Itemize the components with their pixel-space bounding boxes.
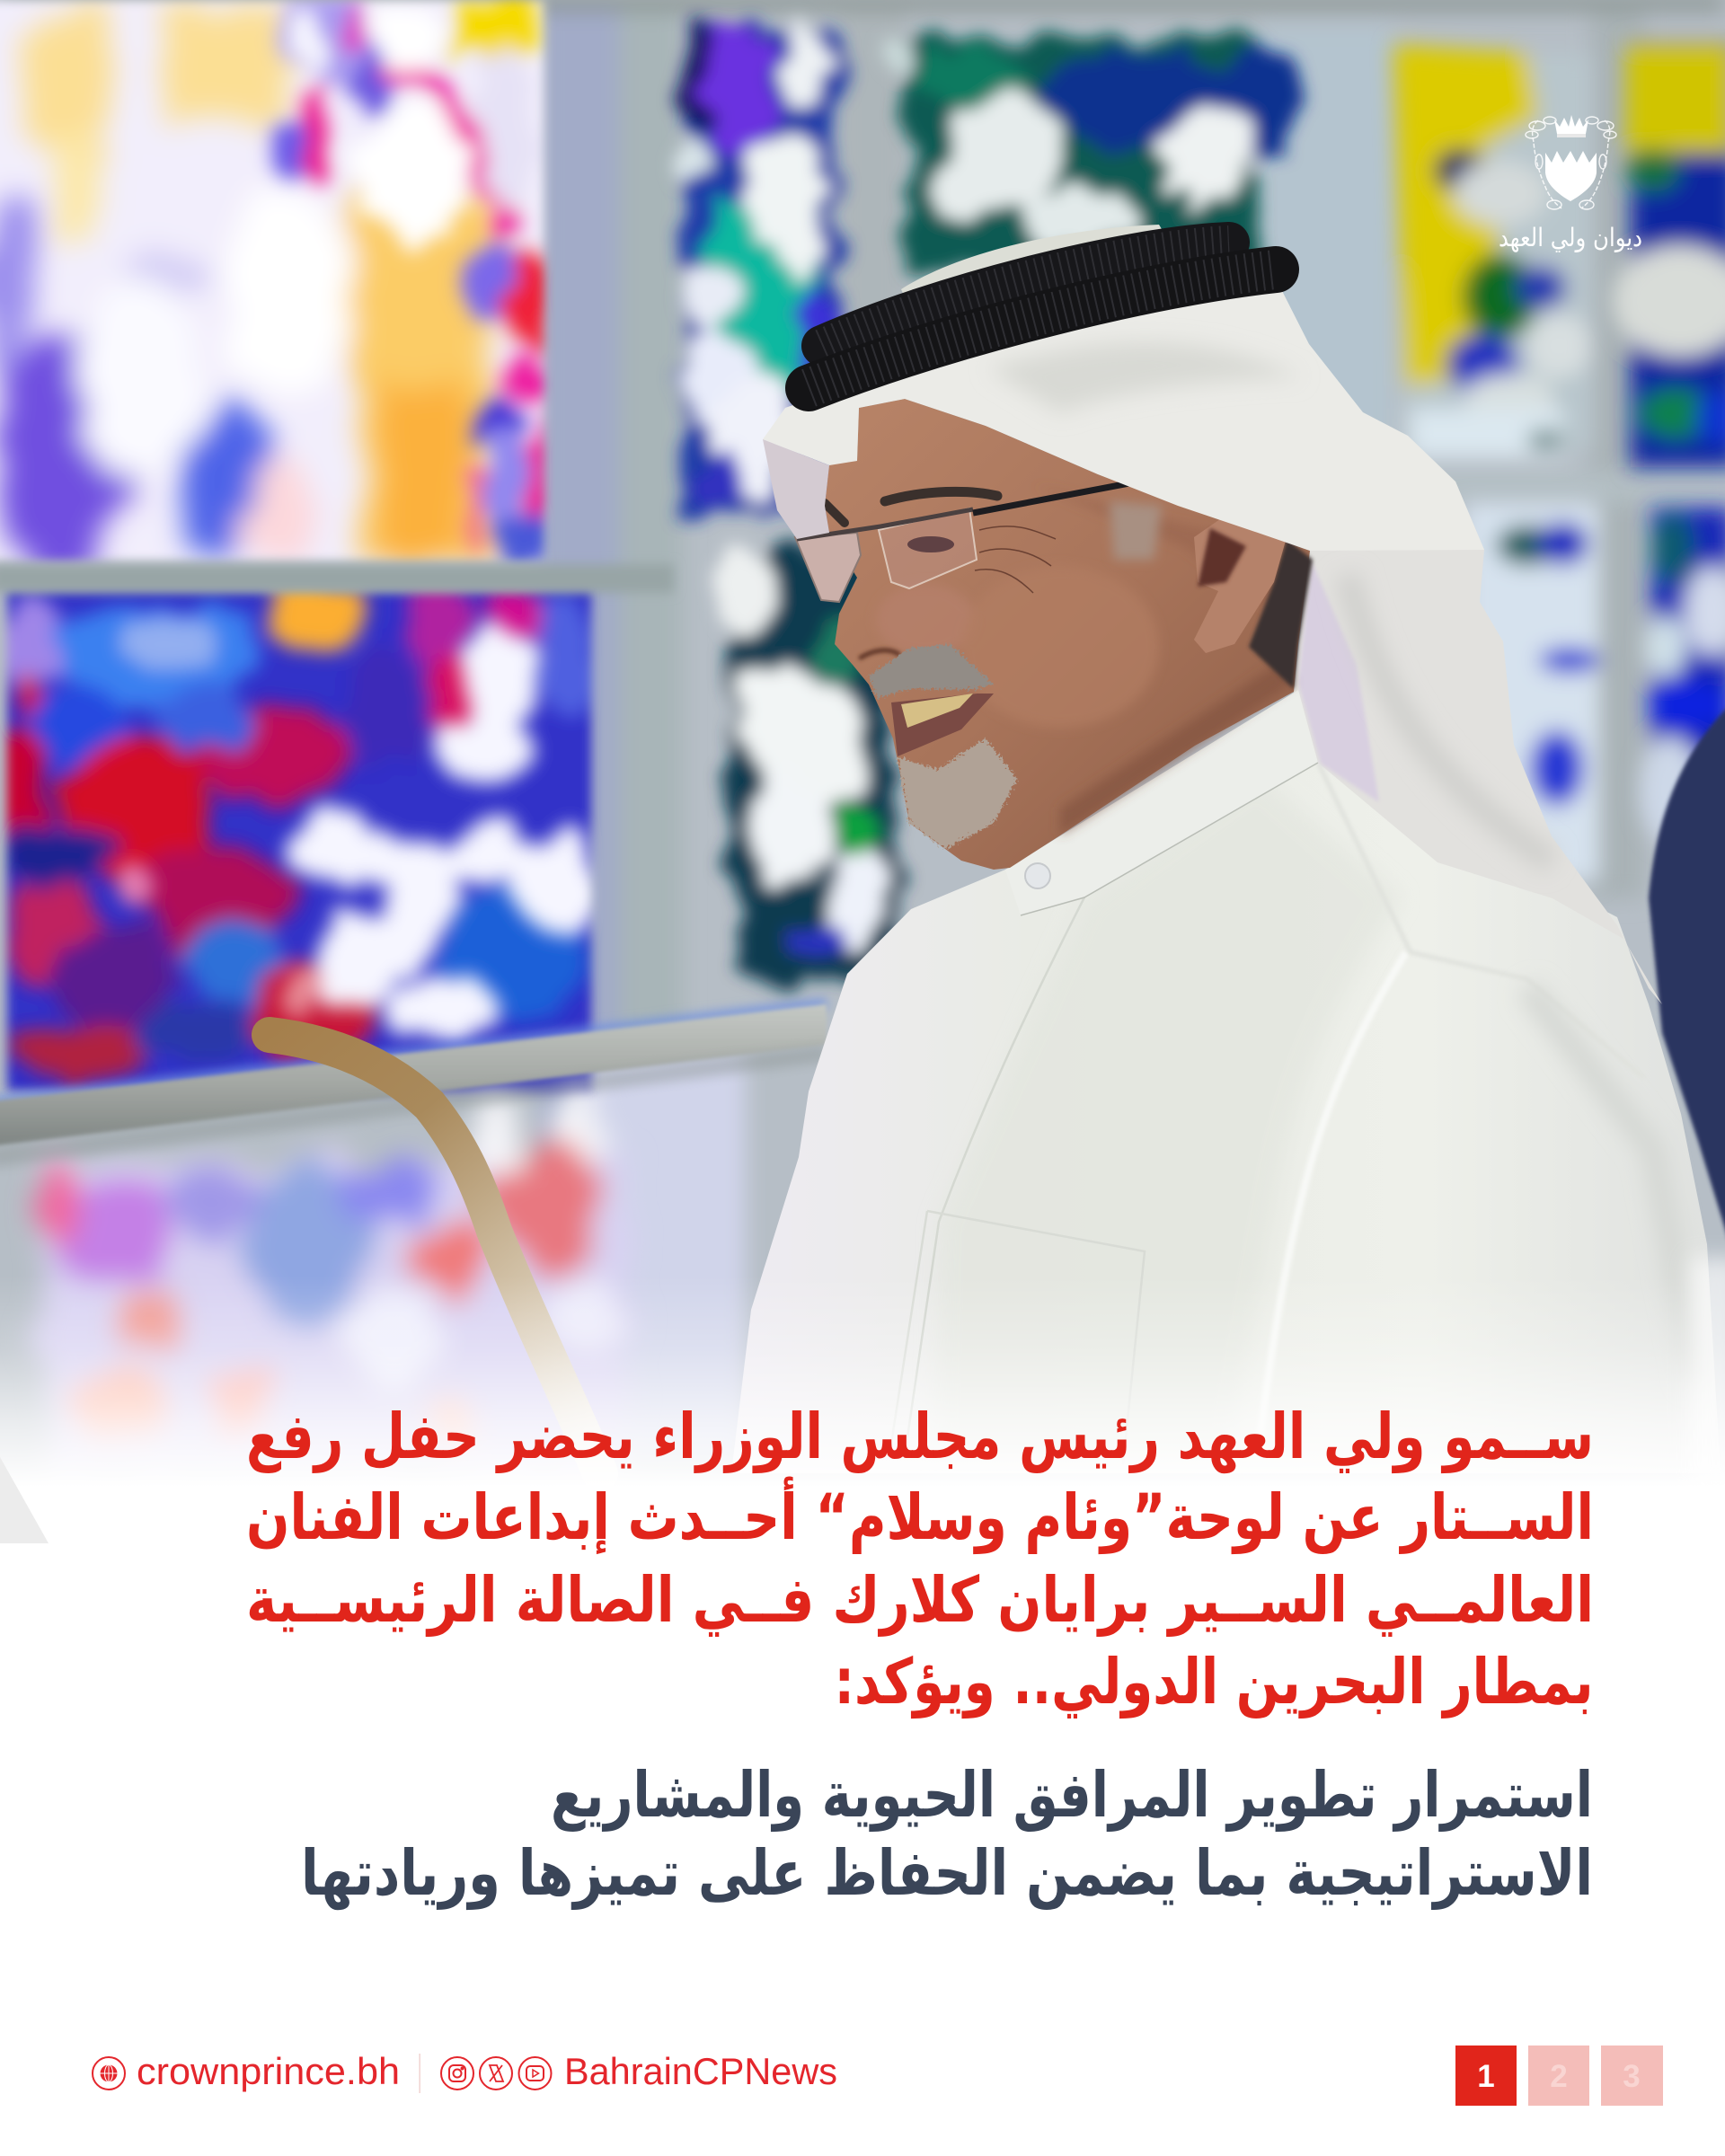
hair behind the ear bbox=[1249, 539, 1313, 689]
window panel: lower left bbox=[0, 573, 600, 1091]
bottom-left pale triangle bbox=[0, 1457, 49, 1543]
window panel: far right lower bbox=[1641, 508, 1725, 844]
headline in red bbox=[246, 1400, 1594, 1719]
face bbox=[825, 399, 1310, 870]
crown bbox=[1554, 115, 1588, 134]
glasses bbox=[795, 482, 1134, 602]
thobe pocket bbox=[889, 1211, 1145, 1464]
window panel: right yellow bbox=[1394, 45, 1591, 458]
eye creases bbox=[975, 526, 1056, 593]
shield bbox=[1545, 151, 1597, 201]
logo: crown prince's court emblem bbox=[1499, 115, 1642, 252]
page 3 bbox=[1601, 2046, 1663, 2106]
icon: instagram bbox=[441, 2057, 473, 2090]
face shading bbox=[876, 485, 1294, 835]
window panel: right lower bbox=[1464, 503, 1600, 880]
page 2 bbox=[1528, 2046, 1589, 2106]
footer divider bbox=[419, 2054, 420, 2093]
icon: globe bbox=[93, 2057, 125, 2090]
window panel: far right top bbox=[1613, 40, 1725, 467]
person in the background, dark suit bbox=[1649, 701, 1725, 1258]
mouth bbox=[891, 694, 994, 756]
page 2: 2 bbox=[1550, 2059, 1568, 2094]
footer: website: crownprince.bh bbox=[137, 2050, 400, 2092]
icon: x bbox=[480, 2057, 512, 2090]
window panel: lower left reflection bbox=[43, 1089, 629, 1482]
collar button bbox=[1025, 863, 1050, 888]
person: crown prince bbox=[731, 225, 1721, 1473]
window panel: centre upper bbox=[884, 37, 1303, 271]
page indicator bbox=[1455, 2046, 1663, 2106]
wreath bbox=[1526, 117, 1616, 209]
thobe placket and folds bbox=[907, 897, 1084, 1437]
page 1 active: 1 bbox=[1477, 2059, 1495, 2094]
white fade over the photo bbox=[0, 1276, 1725, 1487]
window frames bbox=[0, 0, 1725, 1455]
footer: social handles: BahrainCPNews bbox=[564, 2050, 837, 2092]
teeth bbox=[901, 694, 973, 728]
footer: social handles bbox=[441, 2050, 837, 2092]
ghutra, side patterned edge bbox=[763, 439, 829, 539]
ghutra, rear drape bbox=[1258, 482, 1662, 1004]
window panel: narrow centre top bbox=[676, 18, 839, 515]
nostril bbox=[861, 650, 898, 658]
black agal bbox=[809, 243, 1276, 388]
thobe bbox=[731, 763, 1721, 1473]
ghutra, main fold bbox=[763, 278, 1484, 551]
wooden cane bbox=[270, 1035, 600, 1473]
subheading in dark slate bbox=[301, 1758, 1593, 1910]
beard bbox=[898, 738, 1017, 849]
logo wordmark: ديوان ولي العهد bbox=[1499, 223, 1642, 252]
eyebrows bbox=[825, 491, 997, 523]
window panel: centre lower bbox=[708, 545, 896, 981]
window panel: top left bbox=[0, 0, 570, 579]
ear bbox=[1194, 515, 1287, 653]
photo background: stained glass windows bbox=[0, 0, 1725, 1527]
page 1 active bbox=[1455, 2046, 1517, 2106]
moustache bbox=[869, 644, 994, 698]
page 3: 3 bbox=[1623, 2059, 1641, 2094]
ghutra top dome bbox=[901, 225, 1186, 323]
sideburn bbox=[1110, 501, 1162, 560]
neck and collar bbox=[1005, 690, 1318, 915]
icon: youtube bbox=[519, 2057, 552, 2090]
horizontal window bar bbox=[0, 564, 674, 593]
window handrail bbox=[0, 999, 827, 1168]
